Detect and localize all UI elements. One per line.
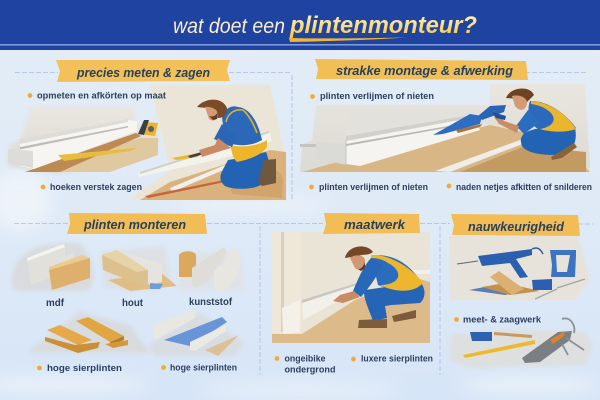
ribbon heading: plinten monteren [83, 217, 186, 232]
bullet: plinten verlijmen bottom: plinten verlijmen of nieten [319, 182, 428, 193]
panel: maatwerk [272, 213, 433, 376]
material: hout: hout [122, 298, 144, 309]
ribbon heading [56, 60, 230, 82]
bullet: meet- & zaagwerk: meet- & zaagwerk [463, 314, 542, 326]
material: hout [100, 246, 177, 309]
icon: tape measure [138, 120, 158, 136]
material: kunststof: kunststof [189, 297, 233, 308]
ribbon heading: strakke montage & afwerking [336, 63, 513, 78]
title: plintenmonteur? [289, 12, 477, 39]
ribbon heading: nauwkeurigheid [468, 219, 565, 234]
bullet: luxere sierplinten: luxere sierplinten [361, 354, 433, 364]
title [173, 12, 477, 42]
bullet: opmeten: opmeten en afkörten op maat [37, 90, 167, 102]
bullet: ongelijke ondergrond: ondergrond [284, 364, 336, 376]
bullet: ongelijke ondergrond [275, 354, 336, 376]
worker [333, 246, 424, 328]
worker [494, 89, 577, 160]
section dashed dividers [14, 72, 593, 375]
ribbon heading [315, 59, 528, 80]
panel: plinten monteren [12, 213, 245, 374]
bullet: hoge sierplinten right: hoge sierplinten [170, 362, 237, 374]
illustration: ruler and caulk gun [450, 318, 593, 368]
ribbon heading: maatwerk [344, 217, 406, 232]
panel: precies meten & zagen [8, 60, 286, 200]
illustration: worker sawing [138, 100, 286, 200]
bullet: hoge sierplinten left: hoge sierplinten [47, 363, 122, 374]
material: hoge sierplinten 1 [30, 312, 150, 353]
panel: nauwkeurigheid [449, 214, 593, 368]
material: kunststof [178, 247, 245, 308]
title: wat doet een [173, 15, 285, 38]
material: hoge sierplinten 2 [148, 310, 245, 356]
material: mdf: mdf [46, 298, 65, 309]
illustration: worker at skirting [272, 232, 430, 343]
bullet: hoeken verstek zagen: hoeken verstek zagen [50, 182, 142, 193]
illustration: plint and nail gun [300, 84, 590, 172]
worker [197, 100, 276, 189]
ribbon heading: precies meten & zagen [76, 65, 210, 80]
ribbon heading [451, 214, 580, 236]
illustration: tools [449, 236, 590, 300]
bullet: plinten verlijmen top: plinten verlijmen of nieten [320, 91, 434, 102]
icon: nail gun [433, 105, 506, 135]
illustration: plint with tape [8, 85, 284, 200]
ribbon heading [67, 213, 207, 234]
material: mdf [12, 243, 94, 309]
ribbon heading [323, 213, 420, 234]
panel: strakke montage & afwerking [300, 59, 592, 193]
bullet: ongelijke ondergrond: ongeibike [284, 354, 326, 364]
header band [0, 0, 600, 50]
